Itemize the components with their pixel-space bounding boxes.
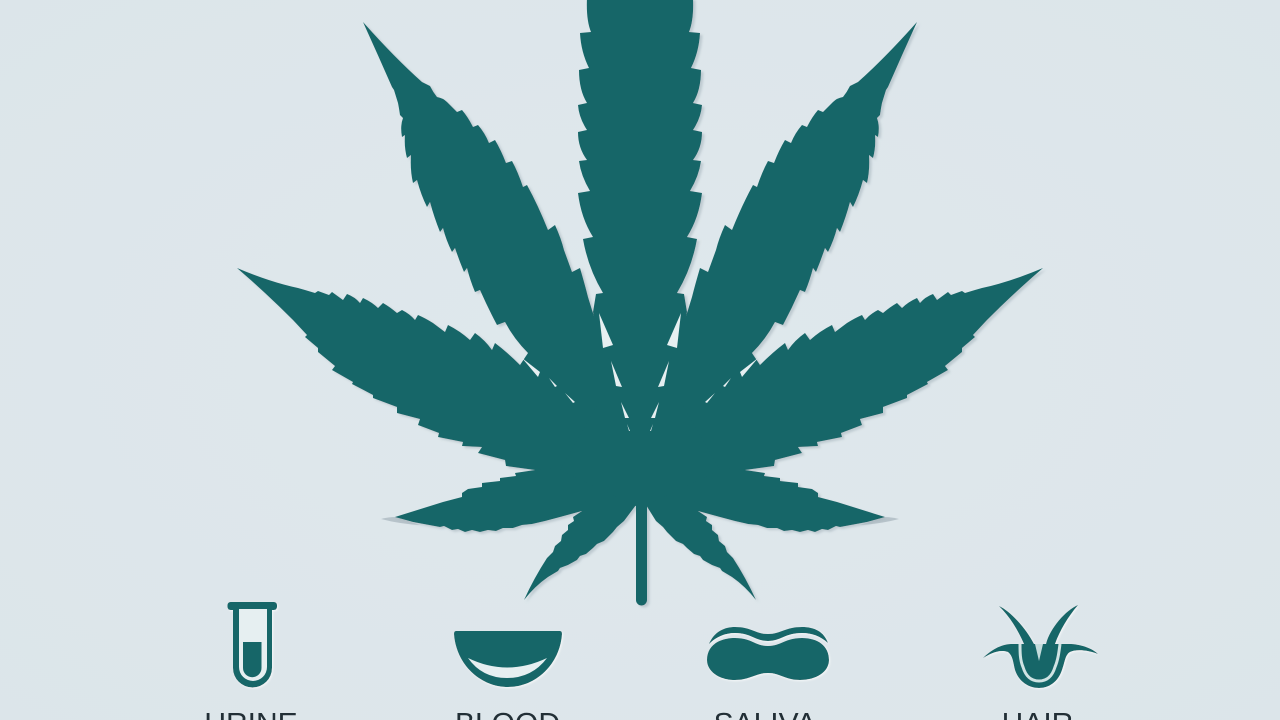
leaf: bottom-left small blade: [524, 480, 640, 600]
icon: blood bowl: [454, 631, 562, 687]
icon: saliva: [707, 627, 829, 680]
leaf: stem: [636, 500, 647, 606]
leaf: middle-right blade: [640, 268, 1043, 500]
leaf: upper-left blade: [363, 22, 640, 450]
icon: urine test tube: [228, 602, 277, 688]
leaf: gaps between blades, right side: [650, 313, 758, 431]
leaf: bottom-right small blade: [640, 480, 756, 600]
leaf: middle-left blade: [237, 268, 640, 500]
leaf: lower-right blade: [640, 460, 885, 532]
leaf: blades and stem: [237, 0, 1043, 606]
leaf: gaps between blades, left side: [522, 313, 630, 431]
leaf: grey shadow at lower blade tips: [381, 517, 899, 525]
leaf: central body: [560, 400, 720, 508]
leaf: lower-left blade: [395, 460, 640, 532]
cannabis leaf illustration: [237, 0, 1043, 606]
leaf: upper-right blade: [640, 22, 917, 450]
leaf: centre blade: [578, 0, 702, 440]
icon: hair follicle: [983, 605, 1098, 688]
